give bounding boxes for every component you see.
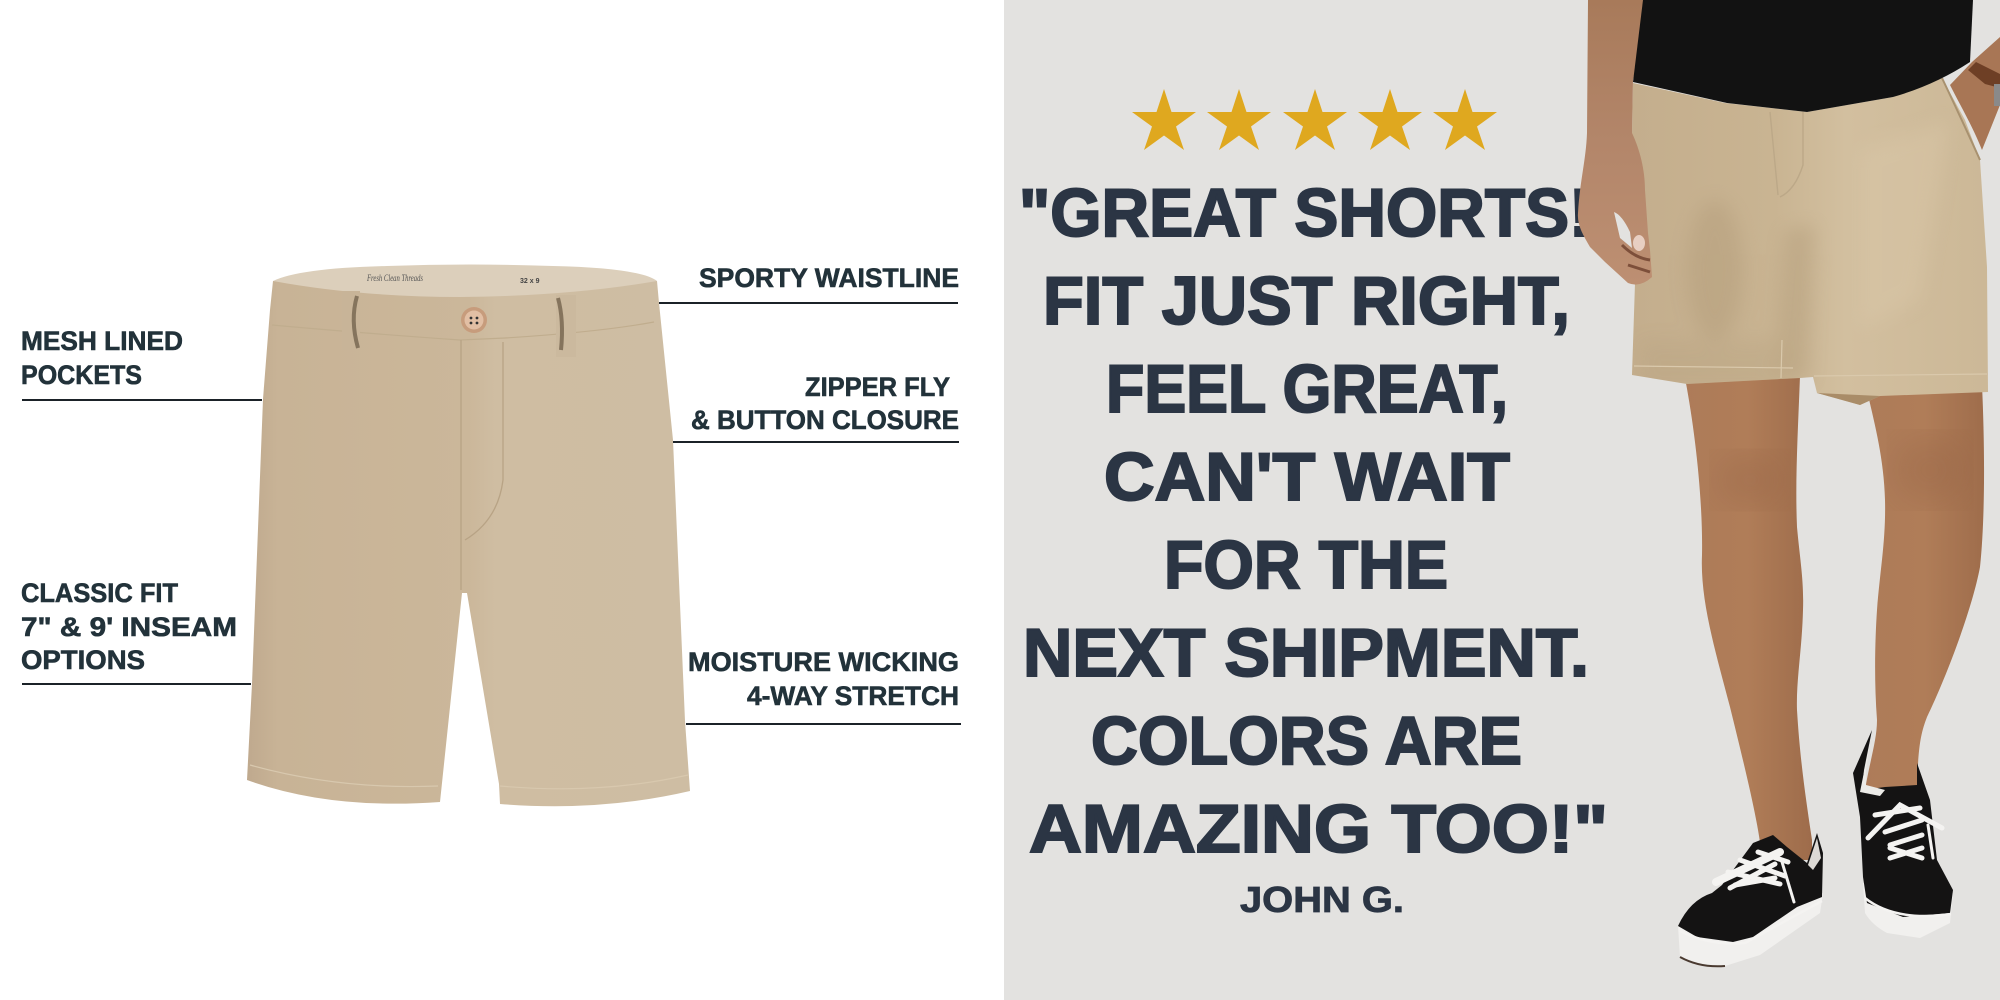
pocket opening xyxy=(1942,78,1980,160)
panel: product features xyxy=(0,0,1004,1000)
review author: JOHN G. xyxy=(1240,879,1404,920)
icon: five star rating xyxy=(1132,89,1497,150)
left sneaker laces xyxy=(1716,852,1794,902)
left sneaker sole xyxy=(1678,893,1823,966)
callout: classic fit and inseam options: CLASSIC FIT xyxy=(21,578,178,608)
review quote: FIT JUST RIGHT, xyxy=(1043,263,1570,339)
review quote: FOR THE xyxy=(1164,527,1448,603)
right sneaker laces xyxy=(1868,805,1942,858)
review quote: COLORS ARE xyxy=(1091,703,1522,779)
callout: moisture wicking 4-way stretch: MOISTURE WICKING xyxy=(688,647,959,677)
review quote: "GREAT SHORTS! xyxy=(1019,175,1591,251)
left sneaker foxing line xyxy=(1680,901,1822,944)
underside of right hem xyxy=(1817,393,1880,405)
waistband seam xyxy=(272,322,654,340)
left arm and hand xyxy=(1578,0,1662,285)
shorts xyxy=(1632,78,1988,405)
callout: mesh lined pockets: POCKETS xyxy=(21,360,142,390)
shorts interior waistband xyxy=(273,264,657,300)
callout: zipper fly and button closure: ZIPPER FLY xyxy=(805,372,950,402)
wristwatch xyxy=(1968,62,2000,106)
review quote: CAN'T WAIT xyxy=(1104,439,1510,515)
callout: zipper fly and button closure xyxy=(673,372,959,443)
belt loop left xyxy=(342,291,360,350)
review quote: NEXT SHIPMENT. xyxy=(1023,615,1589,691)
callout: moisture wicking 4-way stretch xyxy=(686,647,961,725)
callout: sporty waistline: SPORTY WAISTLINE xyxy=(699,263,959,293)
right sneaker collar xyxy=(1860,742,1885,796)
right sneaker xyxy=(1853,730,1953,938)
review quote xyxy=(1019,175,1608,867)
shorts fabric xyxy=(1632,78,1988,405)
photo: man wearing the shorts xyxy=(1578,0,2000,966)
left sneaker collar xyxy=(1808,838,1821,870)
hem stitching xyxy=(250,765,688,789)
fly seam xyxy=(1770,112,1803,197)
callout: classic fit and inseam options xyxy=(21,578,251,685)
left leg xyxy=(1680,370,1815,865)
inner brand label: Fresh Clean Threads xyxy=(366,273,423,283)
fold shading xyxy=(1692,211,1813,378)
shorts body xyxy=(247,281,690,806)
callout: mesh lined pockets: MESH LINED xyxy=(21,326,183,356)
fingernail xyxy=(1633,235,1645,251)
right leg xyxy=(1866,392,1984,788)
right forearm xyxy=(1950,37,2000,150)
right sneaker sole xyxy=(1863,883,1953,938)
black t-shirt xyxy=(1633,0,1973,112)
right sneaker foxing line xyxy=(1865,898,1951,916)
hem seams xyxy=(1634,340,1987,378)
product photo: khaki shorts xyxy=(247,264,690,806)
gap between thumb and fingers xyxy=(1614,212,1632,248)
review quote: AMAZING TOO!" xyxy=(1029,791,1608,867)
callout: classic fit and inseam options: 7" & 9' INSEAM xyxy=(21,612,237,642)
button xyxy=(461,307,487,333)
belt loop right xyxy=(556,295,576,357)
right sneaker upper xyxy=(1853,730,1953,917)
panel: customer review xyxy=(1004,0,2000,1000)
left sneaker upper xyxy=(1678,833,1823,942)
review quote: FEEL GREAT, xyxy=(1106,351,1508,427)
left sneaker xyxy=(1678,833,1823,966)
callout: mesh lined pockets xyxy=(21,326,262,401)
callout: classic fit and inseam options: OPTIONS xyxy=(21,645,145,675)
callout: moisture wicking 4-way stretch: 4-WAY STRETCH xyxy=(747,681,959,711)
callout: zipper fly and button closure: & BUTTON CLOSURE xyxy=(691,405,959,435)
fly stitching xyxy=(461,340,503,590)
left sneaker sole shadow xyxy=(1680,957,1725,966)
inner size label: 32 x 9 xyxy=(520,278,540,285)
finger creases xyxy=(1622,245,1650,272)
